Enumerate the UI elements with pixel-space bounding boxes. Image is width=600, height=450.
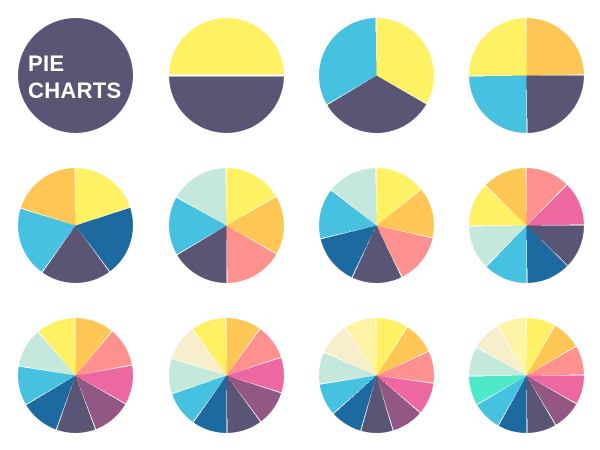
pie 5: five slices — [18, 168, 133, 283]
pie 3: thirds — [319, 18, 434, 133]
pie 11: eleven slices — [319, 318, 434, 433]
pie 6: six slices — [169, 168, 284, 283]
pie 8: eight slices — [469, 168, 584, 283]
title: CHARTS — [28, 78, 121, 103]
pie 2: halves — [169, 18, 284, 133]
title: PIE — [28, 51, 64, 76]
pie 12: twelve slices — [469, 318, 584, 433]
pie 10: ten slices — [169, 318, 284, 433]
pie 4: quarters — [469, 18, 584, 133]
title — [28, 51, 121, 103]
pie 1: title circle — [18, 18, 133, 133]
pie 9: nine slices — [18, 318, 133, 433]
pie 7: seven slices — [319, 168, 434, 283]
